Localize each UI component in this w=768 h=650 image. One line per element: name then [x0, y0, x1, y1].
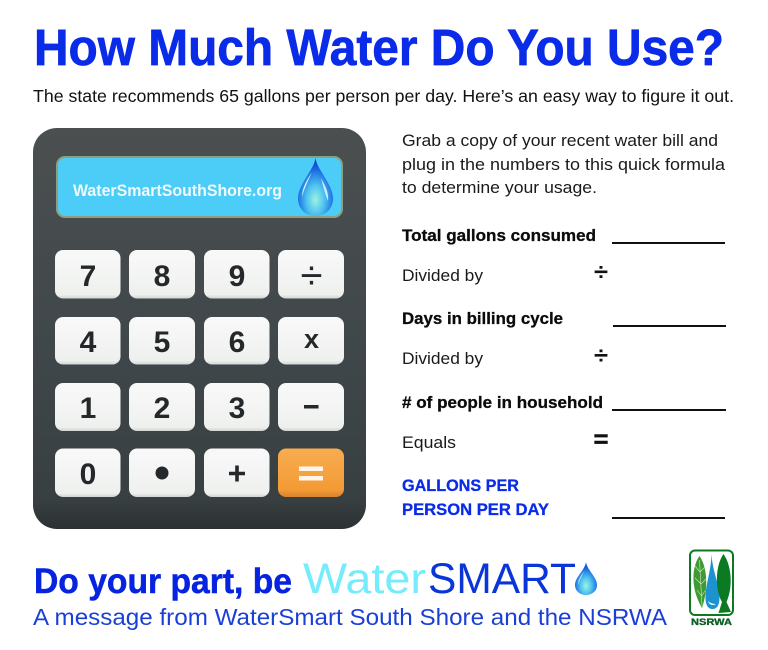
- divided by row: Divided by: [402, 266, 484, 285]
- divided by row: ÷: [594, 259, 608, 286]
- intro text: Grab a copy of your recent water bill and: [402, 131, 718, 150]
- drop: [706, 554, 720, 609]
- subtitle: The state recommends 65 gallons per person per day. Here’s an easy way to figure it out.: [33, 86, 734, 106]
- equals row: Equals: [402, 433, 456, 452]
- calculator screen: [57, 157, 342, 217]
- equals row: [402, 426, 608, 454]
- slogan: Do your part, be: [34, 562, 292, 601]
- gallons per person per day result: GALLONS PER: [402, 476, 519, 495]
- message line: A message from WaterSmart South Shore and the NSRWA: [33, 604, 667, 630]
- people in household row: # of people in household: [402, 393, 603, 412]
- title: How Much Water Do You Use?: [34, 19, 724, 76]
- formula: [402, 226, 726, 519]
- intro text: plug in the numbers to this quick formula: [402, 155, 726, 174]
- calculator: [33, 128, 366, 529]
- gallons per person per day result: [402, 476, 725, 519]
- key row 0 dot plus equals: [55, 448, 344, 497]
- fish: [717, 554, 731, 613]
- key row 1 2 3 minus: 2: [154, 392, 170, 425]
- slogan: Water: [303, 555, 426, 603]
- website address: WaterSmartSouthShore.org: [73, 182, 282, 200]
- key row 4 5 6 x: [55, 317, 344, 364]
- calculator body: [33, 128, 366, 529]
- key row 1 2 3 minus: 3: [229, 392, 245, 425]
- key row 4 5 6 x: 6: [229, 326, 245, 359]
- icon: small water drop: [575, 562, 597, 595]
- NSRWA logo: [690, 550, 733, 627]
- logo label: NSRWA: [691, 617, 733, 627]
- key row 4 5 6 x: 4: [80, 326, 97, 359]
- key row 7 8 9 divide: [55, 250, 344, 298]
- key row 7 8 9 divide: 7: [80, 260, 96, 293]
- divided by row: [402, 342, 608, 370]
- slogan: SMART: [428, 555, 576, 603]
- intro text: [402, 131, 726, 197]
- orange equals key: [278, 448, 344, 497]
- slogan: [34, 555, 597, 603]
- intro text: to determine your usage.: [402, 178, 597, 197]
- key row 7 8 9 divide: 8: [154, 260, 170, 293]
- key row 4 5 6 x: x: [304, 324, 319, 354]
- key row 7 8 9 divide: 9: [229, 260, 245, 293]
- gallons per person per day result: PERSON PER DAY: [402, 500, 550, 519]
- leaf: [693, 556, 706, 608]
- divided by row: ÷: [594, 342, 608, 370]
- icon: water drop: [298, 158, 333, 216]
- divided by row: Divided by: [402, 349, 484, 368]
- key row 1 2 3 minus: 1: [80, 392, 96, 425]
- key row 4 5 6 x: 5: [154, 326, 170, 359]
- equals row: =: [594, 426, 608, 454]
- days in billing cycle row: Days in billing cycle: [402, 309, 563, 328]
- key row 1 2 3 minus: [55, 383, 344, 431]
- divided by row: [402, 259, 608, 286]
- key row 0 dot plus equals: 0: [80, 458, 96, 491]
- total gallons row: Total gallons consumed: [402, 226, 596, 245]
- key row 7 8 9 divide: ÷: [301, 254, 322, 298]
